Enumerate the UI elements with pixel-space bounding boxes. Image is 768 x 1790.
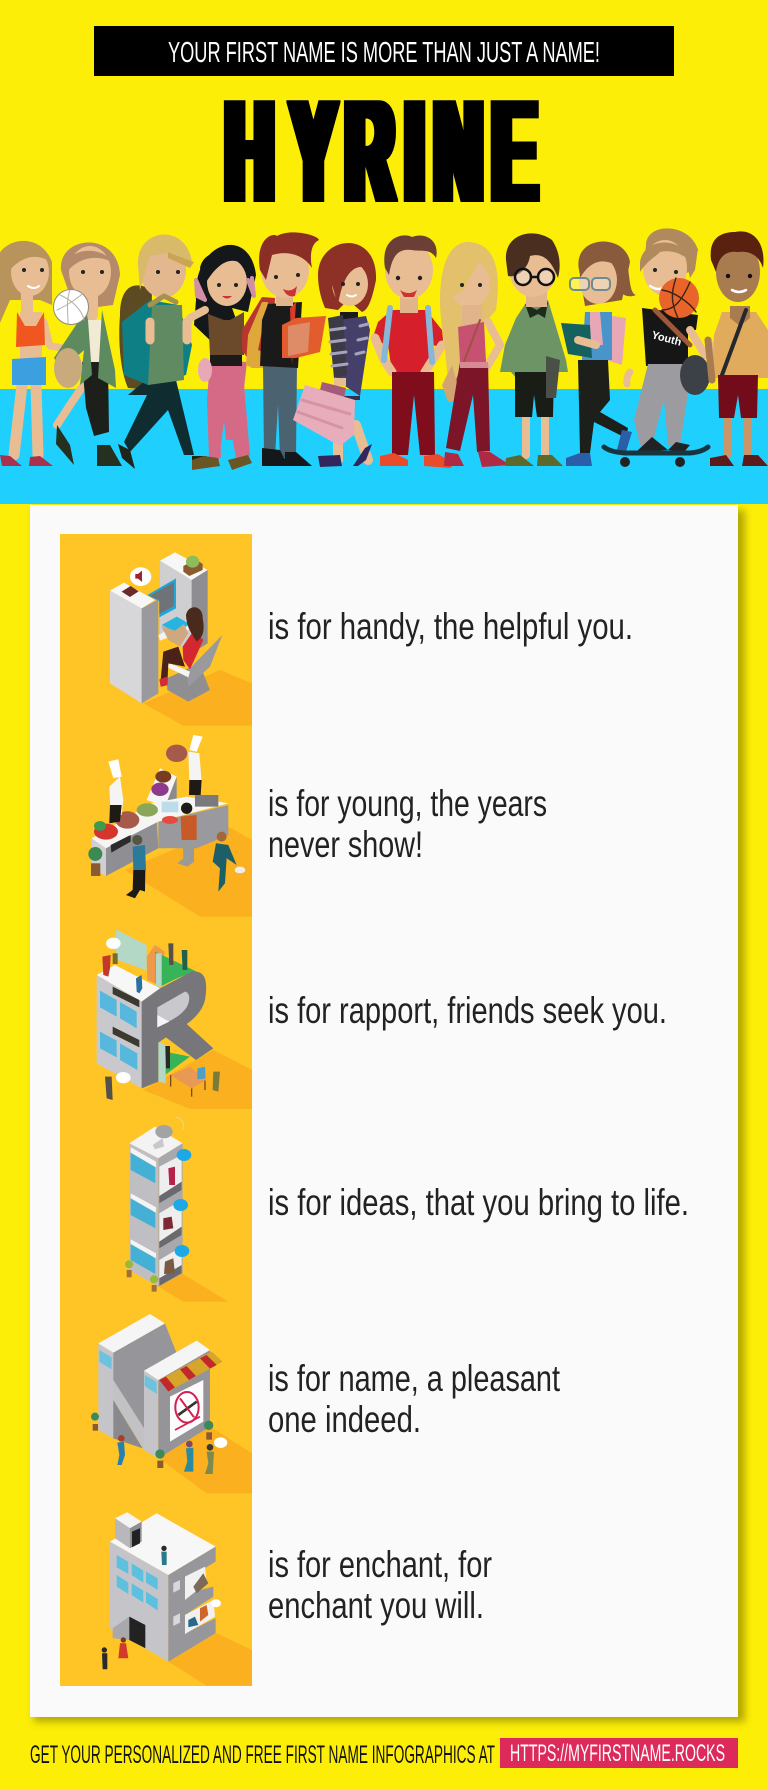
person 2: girl with volleyball (54, 242, 122, 466)
person 6: girl with red hair and pink bag (293, 243, 376, 467)
floor band (0, 389, 768, 504)
letter line E (268, 1544, 492, 1626)
person 11: skateboarder with basketball (604, 228, 720, 467)
letter line Y (268, 783, 547, 865)
tagline bar (94, 26, 674, 76)
icon: letter I tower (125, 1117, 228, 1302)
letter line N (268, 1358, 561, 1440)
letter line E: enchant you will. (268, 1585, 484, 1626)
icon: letter H building with woman at computer (110, 552, 252, 726)
letter line R: is for rapport, friends seek you. (268, 990, 667, 1031)
person 10: girl with glasses and ponytail (561, 241, 636, 466)
letter line N: is for name, a pleasant (268, 1358, 561, 1399)
icon: letter R office building (97, 929, 252, 1109)
letter line H: is for handy, the helpful you. (268, 606, 633, 647)
person 7: boy in red shirt (372, 235, 455, 468)
letter line E: is for enchant, for (268, 1544, 492, 1585)
person 1: girl in orange top (0, 241, 76, 466)
main white panel shadow (34, 510, 745, 1722)
person 3: boy with cap and backpack (118, 235, 220, 469)
panel: orange illustration column (60, 534, 252, 1686)
person 8: blonde girl (440, 242, 510, 467)
icon: letter E building (102, 1512, 252, 1686)
icon: letter Y buffet counter with chefs (88, 735, 252, 917)
title: name: HYRINE (225, 70, 537, 232)
person 11: skateboarder with basketball: Youth (650, 329, 683, 349)
main white panel (30, 505, 738, 1717)
group of people illustration (0, 228, 768, 470)
person 12: boy in tank top (680, 231, 768, 466)
icon: letter N building with no-smoking sign (91, 1314, 252, 1493)
person 4: girl with headphones (190, 245, 256, 470)
letter line N: one indeed. (268, 1399, 421, 1440)
letter line Y: is for young, the years (268, 783, 547, 824)
letter line Y: never show! (268, 824, 423, 865)
person 5: boy with book (242, 232, 326, 466)
person 9: boy with glasses (500, 233, 568, 466)
